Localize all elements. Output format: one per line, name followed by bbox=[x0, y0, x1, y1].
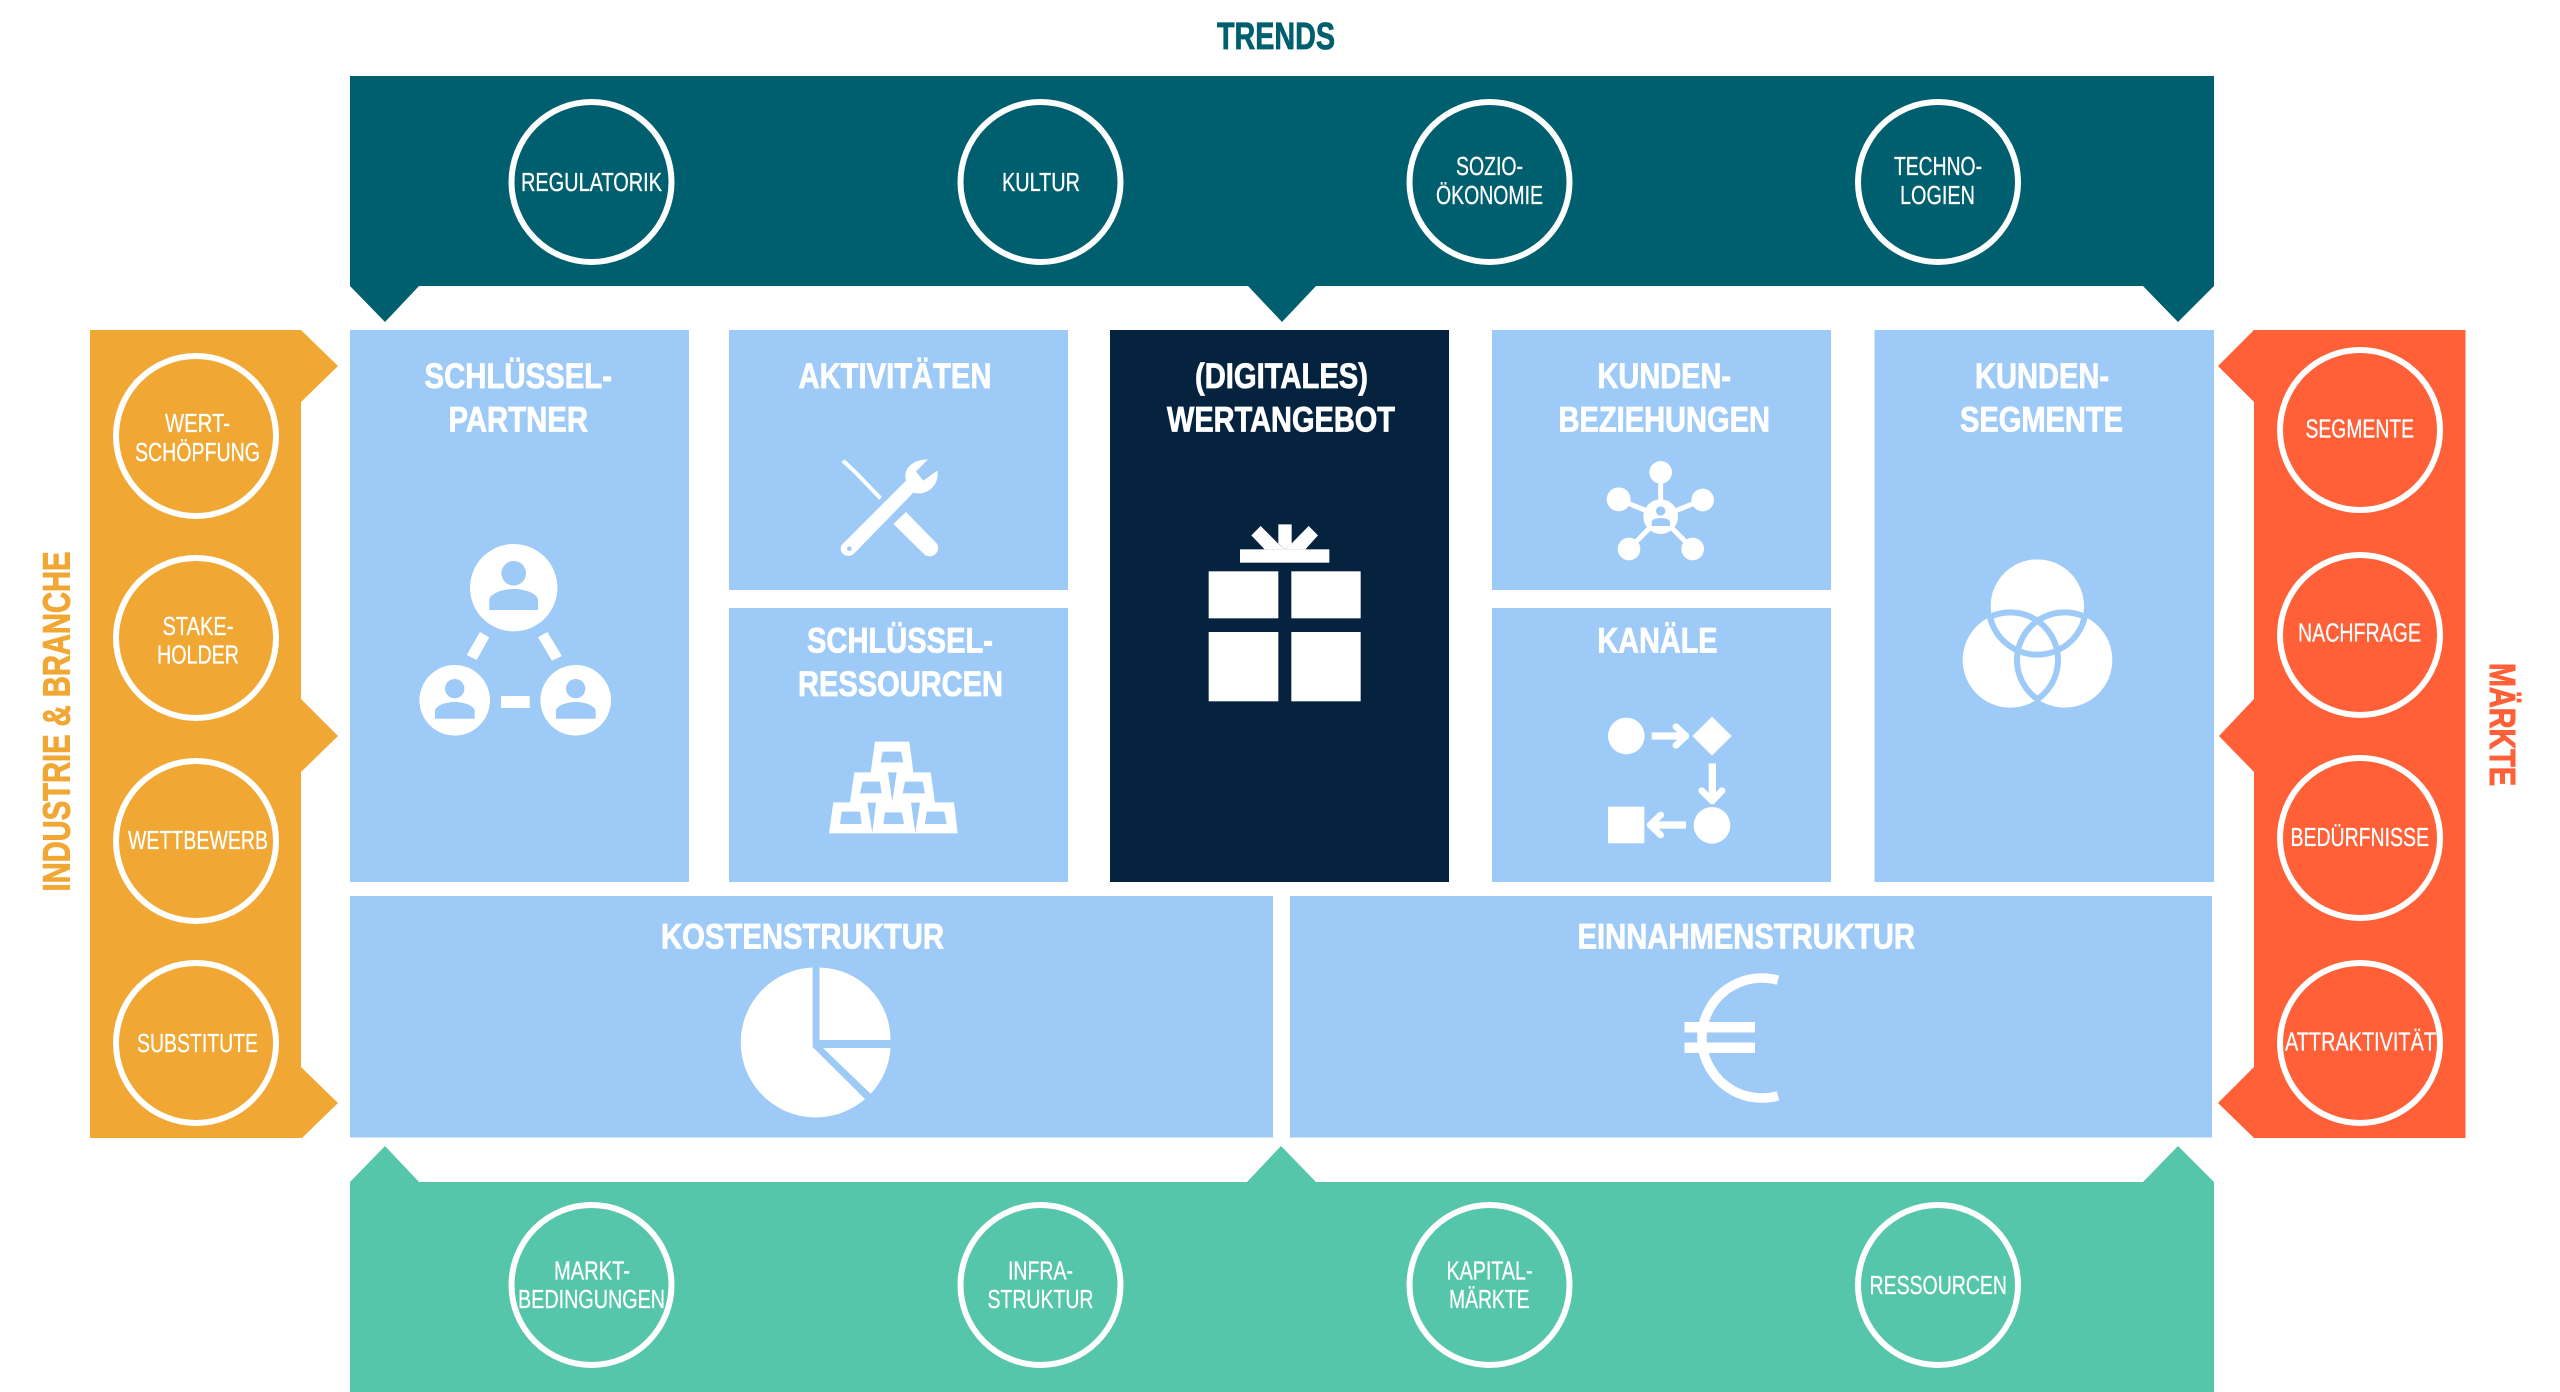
band shape with pointers bbox=[350, 1146, 2214, 1392]
band shape with pointers bbox=[2218, 330, 2466, 1138]
circle: Sozio-Ökonomie bbox=[1410, 102, 1570, 262]
side title: Märkte: MÄRKTE bbox=[2482, 663, 2523, 786]
panel: Märkte band bbox=[2218, 330, 2466, 1138]
panel: Einnahmenstruktur bbox=[1290, 896, 2212, 1138]
circle: Marktbedingungen: BEDINGUNGEN bbox=[518, 1284, 665, 1314]
heading: SCHLÜSSEL- bbox=[424, 357, 612, 396]
heading bbox=[424, 357, 612, 440]
heading: EINNAHMENSTRUKTUR bbox=[1578, 918, 1915, 957]
panel: Schlüsselpartner bbox=[350, 330, 689, 882]
circle: Wertschöpfung bbox=[116, 356, 276, 516]
circle: Wettbewerb bbox=[116, 761, 276, 921]
title: Trends: TRENDS bbox=[1217, 16, 1335, 58]
panel: Trends band bbox=[350, 76, 2214, 322]
circle: Ressourcen: RESSOURCEN bbox=[1870, 1270, 2007, 1300]
panel: Kanäle bbox=[1492, 608, 1831, 882]
heading: SCHLÜSSEL- bbox=[807, 622, 993, 661]
circle: Kultur: KULTUR bbox=[1002, 167, 1080, 197]
circle: Technologien: LOGIEN bbox=[1900, 180, 1975, 210]
heading bbox=[1960, 357, 2123, 440]
icon: gift bbox=[1209, 524, 1361, 701]
heading: (DIGITALES) bbox=[1195, 357, 1368, 396]
circle: Segmente bbox=[2280, 350, 2440, 510]
heading bbox=[1558, 357, 1770, 440]
heading: KOSTENSTRUKTUR bbox=[661, 918, 944, 957]
panel: Schlüsselressourcen bbox=[729, 608, 1068, 882]
circle: Infrastruktur bbox=[960, 1205, 1120, 1365]
circle: Segmente: SEGMENTE bbox=[2306, 414, 2414, 444]
circle: Attraktivität bbox=[2280, 963, 2440, 1123]
circle: Kapitalmärkte: MÄRKTE bbox=[1449, 1284, 1530, 1314]
circle: Kapitalmärkte: KAPITAL- bbox=[1446, 1256, 1532, 1286]
heading: AKTIVITÄTEN bbox=[798, 357, 992, 396]
heading: KUNDEN- bbox=[1975, 357, 2109, 396]
circle: Wertschöpfung: SCHÖPFUNG bbox=[135, 437, 260, 467]
heading: SEGMENTE bbox=[1960, 400, 2123, 440]
circle: Regulatorik bbox=[512, 102, 672, 262]
circle: Nachfrage: NACHFRAGE bbox=[2298, 618, 2421, 648]
icon: customer network bbox=[1607, 461, 1714, 560]
icon: channel flow bbox=[1608, 717, 1732, 844]
icon: venn diagram bbox=[1963, 557, 2112, 708]
circle: Marktbedingungen bbox=[512, 1205, 672, 1365]
circle: Infrastruktur: STRUKTUR bbox=[988, 1284, 1094, 1314]
circle: Wettbewerb: WETTBEWERB bbox=[128, 825, 268, 855]
heading bbox=[798, 622, 1003, 704]
panel: Kundenbeziehungen bbox=[1492, 330, 1831, 590]
band shape with pointers bbox=[90, 330, 338, 1138]
icon: pie chart bbox=[741, 968, 891, 1117]
heading: KUNDEN- bbox=[1598, 357, 1731, 396]
icon: partner network bbox=[419, 544, 611, 736]
circle: Stakeholder bbox=[116, 558, 276, 718]
panel: Industrie und Branche band bbox=[90, 330, 338, 1138]
circle: Technologien: TECHNO- bbox=[1894, 151, 1982, 181]
circle: Regulatorik: REGULATORIK bbox=[521, 167, 663, 197]
heading: RESSOURCEN bbox=[798, 665, 1003, 704]
circle: Substitute: SUBSTITUTE bbox=[137, 1028, 258, 1058]
circle: Stakeholder: HOLDER bbox=[157, 640, 239, 670]
side title: Industrie & Branche: INDUSTRIE & BRANCHE bbox=[36, 552, 78, 892]
circle: Sozio-Ökonomie: ÖKONOMIE bbox=[1436, 180, 1543, 210]
circle: Technologien bbox=[1858, 102, 2018, 262]
circle: Ressourcen bbox=[1858, 1205, 2018, 1365]
heading bbox=[1167, 357, 1395, 440]
circle: Substitute bbox=[116, 963, 276, 1123]
band shape with pointers bbox=[350, 76, 2214, 322]
circle: Bedürfnisse bbox=[2280, 758, 2440, 918]
icon: euro symbol bbox=[1684, 978, 1778, 1098]
circle: Kapitalmärkte bbox=[1410, 1205, 1570, 1365]
circle: Infrastruktur: INFRA- bbox=[1008, 1256, 1073, 1286]
panel: Kundensegmente bbox=[1874, 330, 2214, 882]
circle: Bedürfnisse: BEDÜRFNISSE bbox=[2290, 822, 2429, 852]
icon: gold bars bbox=[829, 742, 958, 833]
circle: Kultur bbox=[960, 102, 1120, 262]
circle: Wertschöpfung: WERT- bbox=[165, 408, 230, 438]
heading: PARTNER bbox=[448, 400, 588, 440]
circle: Nachfrage bbox=[2280, 555, 2440, 715]
icon: tools bbox=[841, 459, 938, 556]
heading: BEZIEHUNGEN bbox=[1558, 400, 1770, 440]
circle: Marktbedingungen: MARKT- bbox=[554, 1256, 630, 1286]
circle: Sozio-Ökonomie: SOZIO- bbox=[1456, 151, 1523, 181]
panel: Bottom resources band bbox=[350, 1146, 2214, 1392]
heading: WERTANGEBOT bbox=[1167, 400, 1395, 440]
circle: Stakeholder: STAKE- bbox=[162, 611, 234, 641]
panel: (Digitales) Wertangebot bbox=[1110, 330, 1449, 882]
panel: Aktivitäten bbox=[729, 330, 1068, 590]
circle: Attraktivität: ATTRAKTIVITÄT bbox=[2285, 1026, 2436, 1056]
panel: Kostenstruktur bbox=[350, 896, 1273, 1138]
heading: KANÄLE bbox=[1598, 622, 1718, 661]
